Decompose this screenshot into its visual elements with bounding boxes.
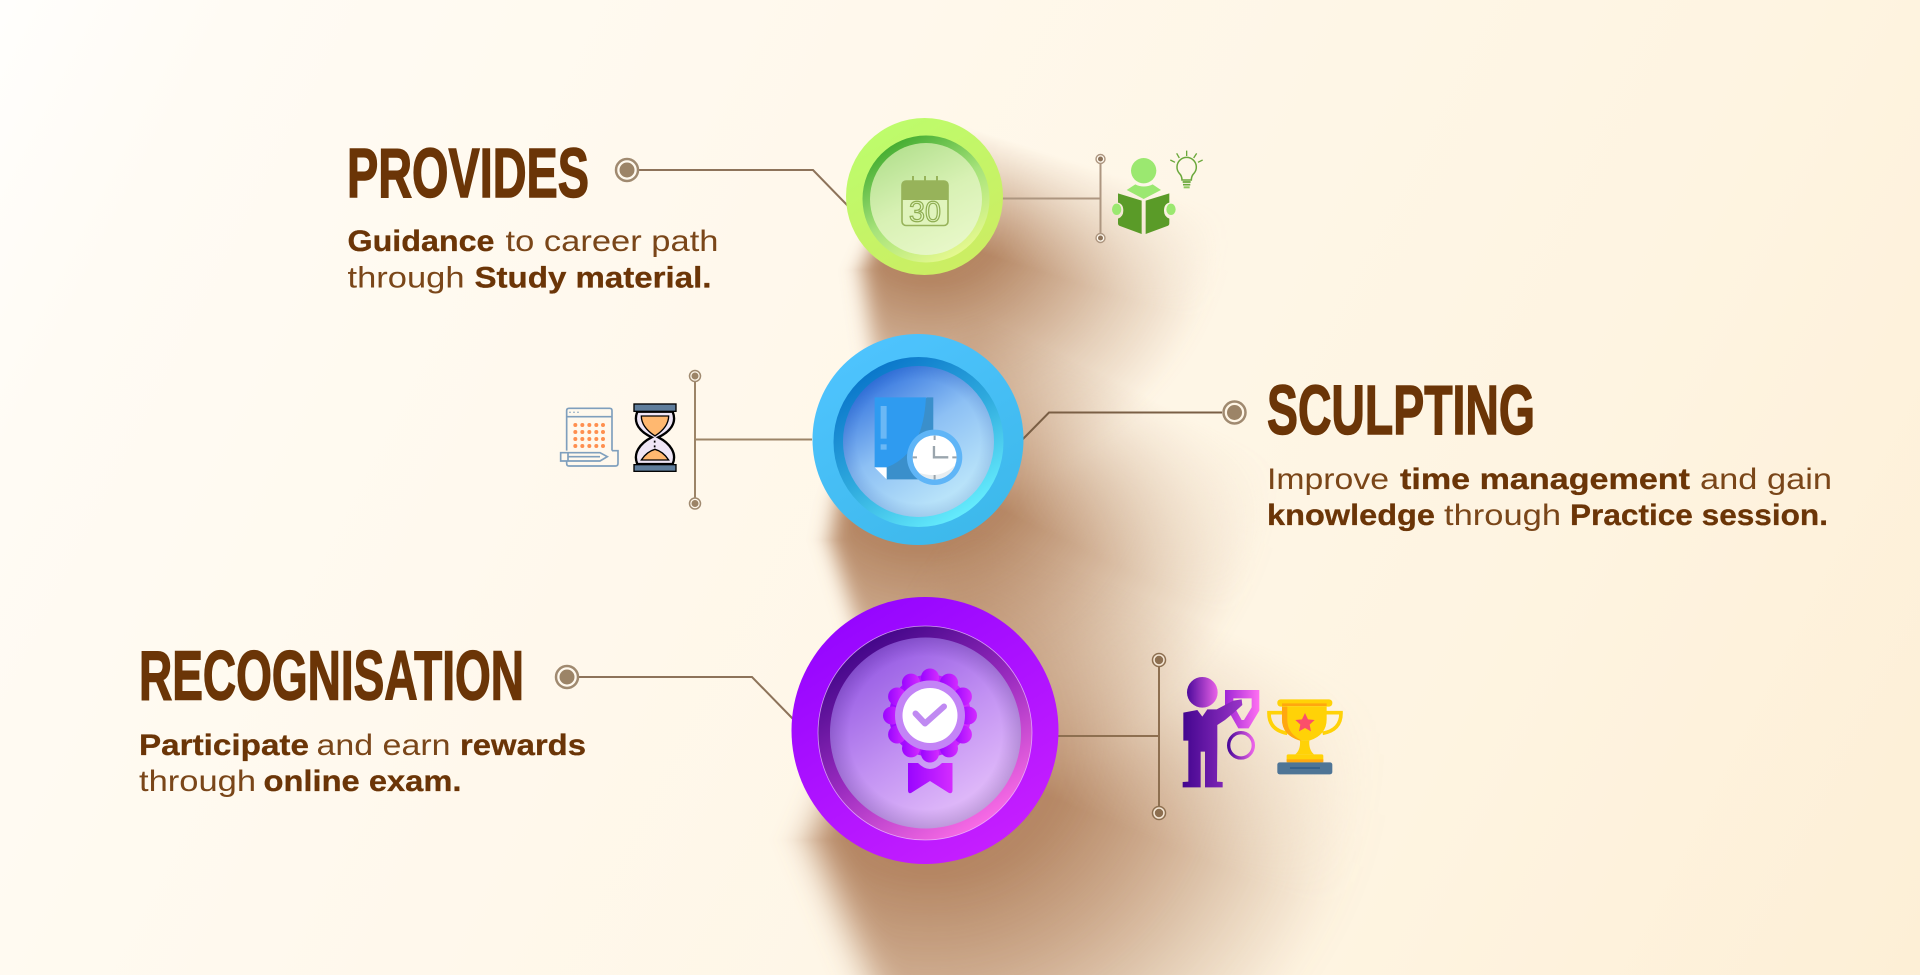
connector: recognisation heading to circle — [556, 666, 793, 719]
panel: provides — [347, 118, 1203, 294]
text block: sculpting description: Improve — [1267, 463, 1389, 496]
heading: provides: PROVIDES — [347, 134, 589, 212]
text block: sculpting description: time management — [1400, 463, 1690, 496]
connector: provides heading to circle — [616, 159, 848, 206]
text block: sculpting description: and gain — [1700, 463, 1832, 496]
text block: sculpting description: Practice session. — [1570, 499, 1828, 532]
icon: hourglass — [634, 404, 676, 471]
icon: calendar 30: 30 — [909, 196, 941, 228]
text block: recognisation description — [139, 729, 586, 798]
icon: trophy — [1269, 699, 1341, 774]
text block: sculpting description — [1267, 463, 1832, 532]
text block: recognisation description: Participate — [139, 729, 309, 762]
circle: blue document clock — [812, 334, 1024, 545]
text block: provides description — [348, 225, 718, 294]
connector: circle to achievement icons — [1058, 654, 1166, 820]
heading: sculpting: SCULPTING — [1267, 371, 1535, 449]
text block: recognisation description: through — [139, 765, 256, 798]
text block: provides description: to career path — [506, 225, 718, 258]
circle: purple badge — [792, 597, 1058, 864]
drop shadows — [786, 138, 1332, 975]
text block: sculpting description: knowledge — [1267, 499, 1435, 532]
text block: recognisation description: online exam. — [264, 765, 462, 798]
icon: document with clock — [875, 397, 962, 485]
text block: recognisation description: rewards — [460, 729, 586, 762]
icon: calendar 30 — [902, 176, 948, 228]
connector: circle to time icons — [690, 370, 812, 509]
panel: sculpting — [561, 334, 1832, 545]
panel: recognisation — [139, 597, 1341, 864]
icon: award rosette — [883, 668, 977, 793]
text block: sculpting description: through — [1444, 499, 1561, 532]
connector: circle to study icon — [1002, 154, 1105, 242]
connector: circle to sculpting heading — [1022, 402, 1246, 440]
heading: recognisation: RECOGNISATION — [139, 636, 524, 714]
text block: recognisation description: and earn — [316, 729, 450, 762]
icon: calendar sheet with pencil — [561, 408, 618, 466]
text block: provides description: Guidance — [348, 225, 494, 258]
text block: provides description: Study material. — [474, 262, 712, 294]
icon: person holding shield medal — [1183, 677, 1259, 787]
text block: provides description: through — [348, 262, 464, 294]
icon: person reading with lightbulb — [1112, 151, 1203, 234]
circle: green calendar — [846, 118, 1003, 275]
